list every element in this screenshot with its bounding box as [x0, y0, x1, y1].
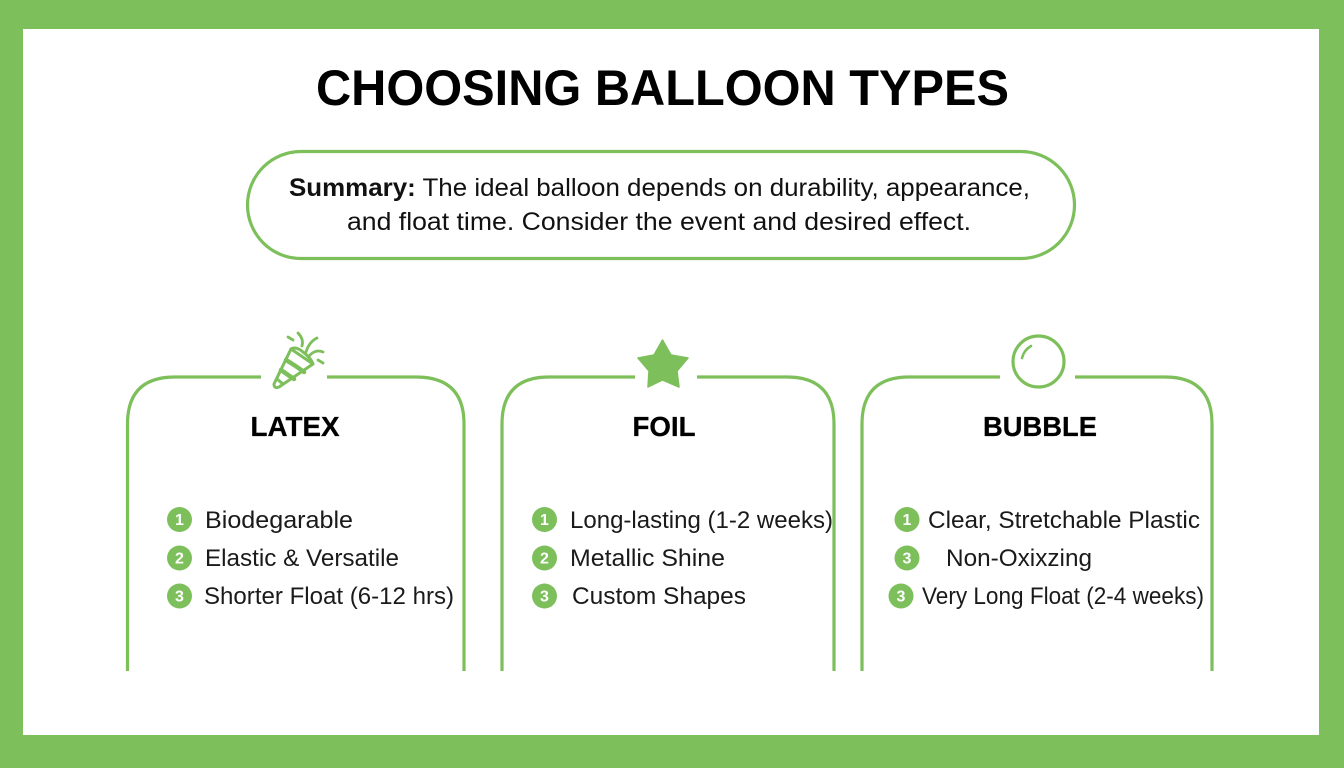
- list: bubble: Very Long Float (2-4 weeks): [922, 583, 1204, 610]
- summary callout: [248, 152, 1074, 258]
- heading: foil: FOIL: [632, 411, 696, 442]
- icon: star: [638, 340, 688, 387]
- list: bubble: Non-Oxixzing: [946, 545, 1092, 572]
- icon: party popper: [274, 333, 323, 388]
- list: latex: 2: [175, 550, 184, 568]
- list: latex: Biodegarable: [205, 507, 353, 534]
- list: bubble: [888, 507, 1204, 610]
- icon: bubble: [1013, 336, 1064, 387]
- panel: bubble: [862, 336, 1212, 671]
- list: latex: Shorter Float (6-12 hrs): [204, 583, 454, 610]
- list: latex: 1: [175, 512, 184, 529]
- panel outline: foil: [502, 377, 834, 671]
- list: foil: Metallic Shine: [570, 545, 725, 572]
- summary callout: and float time. Consider the event and desired effect.: [347, 208, 971, 236]
- title: CHOOSING BALLOON TYPES: [316, 60, 1009, 116]
- list: foil: 1: [540, 512, 549, 529]
- list: bubble: 3: [897, 588, 906, 606]
- panel: foil: [502, 340, 834, 671]
- heading: bubble: BUBBLE: [983, 411, 1097, 442]
- list: foil: Long-lasting (1-2 weeks): [570, 507, 833, 534]
- list: latex: 3: [175, 588, 184, 606]
- list: foil: 2: [540, 550, 549, 568]
- list: bubble: Clear, Stretchable Plastic: [928, 507, 1200, 534]
- summary callout: Summary: The ideal balloon depends on durability, appearance,: [289, 174, 1030, 202]
- list: bubble: 3: [903, 550, 912, 568]
- list: foil: 3: [540, 588, 549, 606]
- panel outline: bubble: [862, 377, 1212, 671]
- list: latex: Elastic & Versatile: [205, 545, 399, 572]
- heading: latex: LATEX: [250, 411, 340, 442]
- list: foil: [532, 507, 833, 610]
- panel outline: latex: [128, 377, 464, 671]
- list: latex: [167, 507, 454, 610]
- list: bubble: 1: [903, 512, 912, 529]
- panel: latex: [128, 333, 464, 671]
- list: foil: Custom Shapes: [572, 583, 746, 610]
